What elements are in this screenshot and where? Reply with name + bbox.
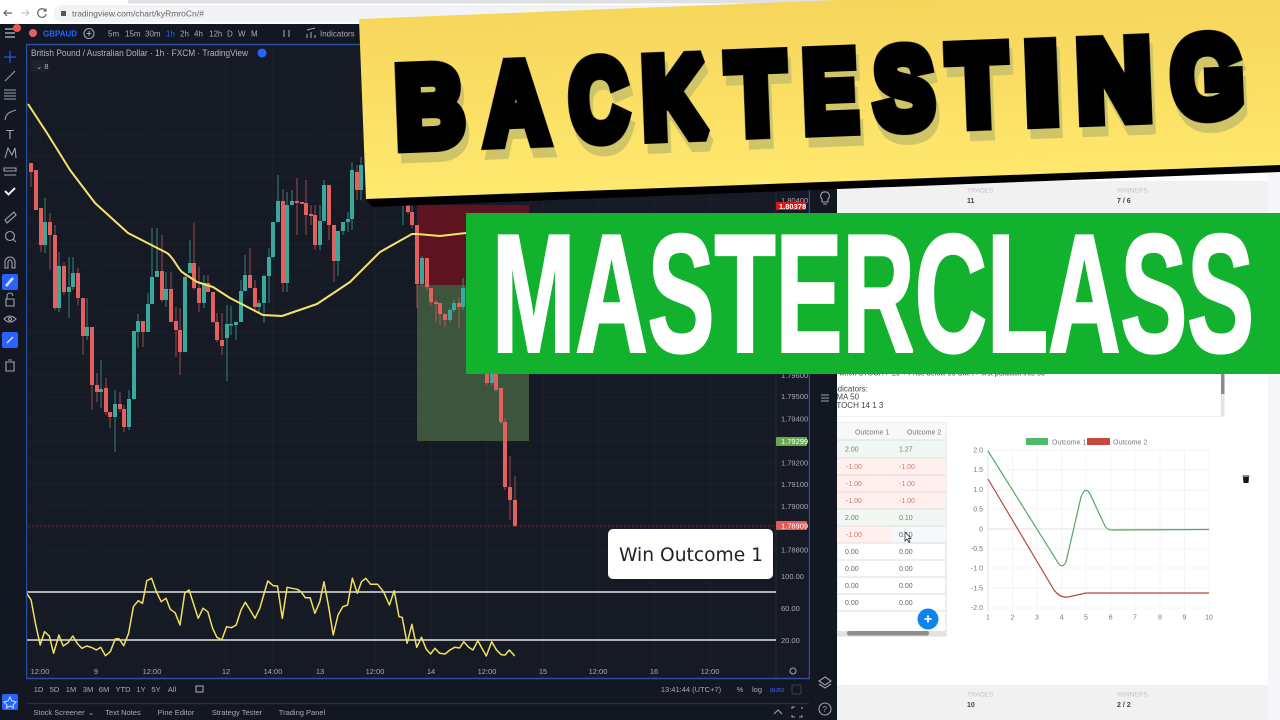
bottom tabs bar: Text Notes [105, 708, 141, 717]
outcome line chart: 10 [1205, 614, 1213, 622]
outcomes table: 0.00 [899, 583, 913, 590]
legend: Outcome 2 [1113, 440, 1147, 446]
bottom tabs bar: Strategy Tester [212, 708, 263, 717]
top toolbar: M [251, 30, 258, 38]
price axis labels: 100.00 [781, 572, 804, 581]
time axis labels: 12:00 [589, 667, 607, 676]
outcomes table: 0.00 [899, 600, 913, 607]
top toolbar: Indicators [320, 30, 355, 38]
strategy notes: STOCH 14 1 3 [831, 401, 884, 410]
time axis labels: 16 [650, 667, 658, 676]
legend [1026, 438, 1147, 446]
strategy notes: Indicators: [831, 384, 868, 394]
outcomes table: Outcome 2 [907, 430, 941, 436]
add row button [918, 608, 938, 630]
outcomes table: -1.00 [846, 532, 862, 539]
price axis labels: 1.78909 [781, 522, 808, 530]
bottom range toolbar: % [737, 685, 744, 694]
top toolbar: D [227, 30, 233, 38]
outcome line chart: 1 [986, 614, 990, 622]
title: BACKTESTING: C [567, 36, 630, 164]
candlestick chart [31, 157, 515, 527]
bottom range toolbar: 1M [66, 685, 76, 694]
browser address bar: tradingview.com/chart/kyRmroCn/# [72, 8, 204, 18]
bottom tabs bar: Pine Editor [158, 708, 195, 717]
outcome line chart: 9 [1183, 614, 1187, 622]
top toolbar: W [238, 30, 246, 38]
outcome line chart: 1.5 [973, 467, 983, 474]
top toolbar: 30m [145, 30, 161, 38]
callout: win outcome 1: Win Outcome 1 [619, 544, 763, 566]
bottom range toolbar: 5Y [151, 685, 161, 694]
outcome line chart [971, 438, 1213, 622]
outcomes table: Outcome 1 [855, 430, 889, 436]
title: BACKTESTING: T [726, 30, 787, 158]
chart frame [26, 44, 810, 678]
top stats bar [837, 181, 1268, 213]
bottom stats bar: WINNERS [1117, 692, 1148, 698]
bottom tabs bar: Stock Screener [33, 708, 85, 717]
outcomes table: 0.00 [845, 583, 859, 590]
time axis labels: 13 [316, 667, 324, 676]
outcomes table: -1.00 [899, 481, 915, 488]
outcomes table [837, 423, 946, 636]
outcome line chart: 6 [1109, 614, 1113, 622]
browser address bar [0, 0, 1280, 24]
time axis labels: 15 [539, 667, 547, 676]
outcomes table: -1.00 [899, 498, 915, 505]
time axis labels [31, 667, 796, 676]
outcome line chart: 0 [979, 526, 983, 534]
time axis labels: 9 [94, 667, 98, 676]
price axis labels: 20.00 [781, 636, 800, 645]
outcomes table: -1.00 [846, 481, 862, 488]
price axis labels: 1.79000 [781, 502, 808, 511]
price axis labels: 1.79100 [781, 480, 808, 489]
top toolbar: GBPAUD [43, 30, 77, 38]
outcome line chart: -1.0 [971, 566, 983, 572]
title: BACKTESTING [393, 12, 1245, 171]
strategy notes: Short when STOCH > 20 + Price below 50 SMA + first pullback into 50 [820, 368, 1045, 378]
oscillator line [27, 578, 515, 656]
time axis labels: 12:00 [366, 667, 384, 676]
trade reward box [417, 285, 529, 441]
outcomes table: -1.00 [846, 498, 862, 505]
trade risk box [417, 205, 529, 285]
outcomes table: 0.00 [845, 549, 859, 556]
outcomes table: -1.00 [846, 464, 862, 471]
bottom range toolbar: YTD [116, 685, 131, 694]
top toolbar: 12h [209, 30, 222, 38]
bottom stats bar: 10 [967, 702, 975, 709]
price axis labels: 1.79500 [781, 392, 808, 401]
bottom tabs bar [27, 704, 809, 720]
wicks [31, 163, 515, 527]
price axis labels: 1.79600 [781, 371, 808, 380]
banner shadow: black band [366, 162, 1280, 207]
icon: trash [1242, 476, 1250, 483]
outcomes table: 0.10 [899, 532, 913, 539]
bottom range toolbar: All [168, 685, 176, 694]
outcome line chart: 3 [1035, 614, 1039, 622]
legend: Outcome 1 [1052, 440, 1086, 446]
top stats bar: 7 / 6 [1117, 198, 1131, 205]
moving average line [28, 104, 466, 316]
bottom range toolbar: 6M [99, 685, 109, 694]
outcome line chart: -1.5 [971, 586, 983, 592]
chart legend [31, 48, 266, 71]
current price dashed line [28, 525, 776, 527]
price axis labels: 1.78800 [781, 546, 808, 554]
top stats bar: TRADES [967, 188, 994, 194]
bottom range toolbar: 3M [83, 685, 93, 694]
bottom range toolbar: 13:41:44 (UTC+7) [661, 685, 722, 694]
bottom range toolbar: 5D [50, 685, 60, 694]
outcome line chart: 2.0 [973, 448, 983, 454]
outcome line chart: 2 [1011, 614, 1015, 622]
top toolbar [29, 28, 355, 38]
title: BACKTESTING: T [947, 22, 1008, 149]
time axis labels: 12:00 [31, 667, 49, 676]
outcomes table: -1.00 [899, 464, 915, 471]
bottom range toolbar: 1Y [136, 685, 146, 694]
banner: yellow title strip [359, 0, 1280, 199]
title: BACKTESTING: A [483, 41, 550, 168]
price axis labels: 1.79400 [781, 414, 808, 424]
title: BACKTESTING: E [801, 28, 859, 155]
top toolbar: 2h [180, 30, 189, 38]
right side toolbar: ? [822, 705, 828, 714]
time axis labels: 12 [222, 667, 230, 676]
bottom range toolbar: auto [770, 685, 784, 694]
outcome line chart: 5 [1084, 614, 1088, 622]
outcome line chart: 1.0 [973, 487, 983, 494]
outcomes table: 0.00 [845, 566, 859, 573]
outcomes table: 2.00 [845, 515, 859, 522]
outcomes table: 2.00 [845, 446, 859, 454]
strategy notes [820, 368, 1224, 416]
price axis labels: 1.80400 [781, 196, 808, 205]
outcomes table: 0.00 [899, 566, 913, 573]
time axis labels: 12:00 [701, 667, 719, 676]
callout: win outcome 1 [608, 529, 773, 579]
top toolbar: 1h [166, 30, 175, 38]
bottom range toolbar: log [752, 685, 762, 694]
outcome line chart: 7 [1133, 614, 1137, 622]
price axis labels: 1.79200 [781, 458, 808, 468]
outcomes table: 1.27 [899, 446, 913, 454]
title: BACKTESTING: B [393, 42, 466, 170]
outcome line chart: 0.5 [973, 506, 983, 514]
title: BACKTESTING: K [640, 34, 708, 162]
bottom stats bar: 2 / 2 [1117, 702, 1131, 709]
top toolbar: 15m [125, 30, 141, 38]
left drawing toolbar [0, 24, 26, 720]
outcome line chart: -0.5 [971, 546, 983, 553]
price axis labels: 1.79299 [781, 437, 808, 446]
title: BACKTESTING: G [1169, 12, 1245, 141]
price axis labels: 1.80378 [779, 202, 806, 211]
top stats bar: WINNERS [1117, 188, 1148, 194]
top toolbar: 4h [194, 30, 203, 38]
top stats bar: 11 [967, 198, 975, 205]
panel: backtest app [820, 170, 1280, 720]
strategy notes: SMA 50 [831, 392, 860, 402]
teal bodies [45, 165, 492, 427]
panel: chart background [27, 45, 809, 678]
price axis labels: 60.00 [781, 604, 800, 613]
time axis labels: 12:00 [143, 667, 161, 676]
title: BACKTESTING: S [872, 26, 936, 152]
outcomes table: 0.10 [899, 515, 913, 522]
time axis labels: 12:00 [478, 667, 496, 676]
banner: green subtitle strip [466, 213, 1280, 374]
top toolbar: 5m [108, 30, 119, 38]
bottom range toolbar [27, 680, 809, 702]
left drawing toolbar: T [6, 127, 14, 142]
chart legend: British Pound / Australian Dollar · 1h · FXCM · TradingView [31, 48, 248, 58]
right side toolbar [810, 24, 837, 720]
time axis labels: 14 [427, 667, 435, 676]
title: BACKTESTING: I [1023, 20, 1061, 146]
bottom tabs bar: ⌄ [88, 708, 94, 717]
outcomes table: 0.00 [845, 600, 859, 607]
title: BACKTESTING: N [1075, 17, 1154, 144]
time axis labels: 14:00 [264, 667, 282, 676]
bottom stats bar: TRADES [967, 692, 994, 698]
outcome line chart: 4 [1060, 614, 1064, 622]
outcome line chart: 8 [1158, 614, 1162, 622]
red bodies [31, 163, 515, 526]
chart legend: ⌄ 8 [36, 62, 49, 71]
outcome line chart: -2.0 [971, 605, 983, 612]
bottom tabs bar: Trading Panel [279, 708, 326, 717]
oscillator level lines [27, 592, 776, 640]
bottom range toolbar: 1D [34, 685, 44, 694]
price axis labels [776, 196, 808, 645]
outcomes table: 0.00 [899, 549, 913, 556]
bottom stats bar [837, 685, 1268, 720]
